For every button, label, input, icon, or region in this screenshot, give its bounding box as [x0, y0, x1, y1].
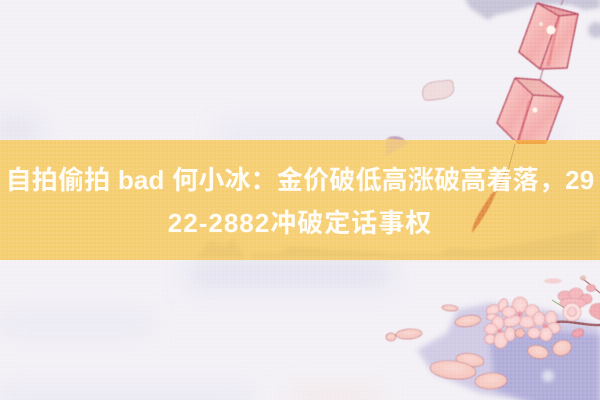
rose cluster: [558, 276, 600, 321]
petal: floating: [422, 80, 454, 100]
lavender watercolor wash: [417, 303, 600, 400]
kite: [386, 136, 408, 156]
lantern: upper: [519, 0, 578, 80]
buds: [515, 327, 585, 339]
blossom: center: [502, 297, 539, 329]
kite string and tassel: [472, 144, 515, 233]
lantern base over banner: [515, 140, 548, 144]
paper wash tints: [0, 118, 560, 400]
title line 1: 自拍偷拍 bad 何小冰：金价破低高涨破高着落，29: [6, 165, 594, 195]
title line 2: 22-2882冲破定话事权: [168, 208, 432, 238]
banner hills: [195, 228, 598, 258]
yellow banner: [0, 136, 600, 260]
cherry branch: [552, 278, 600, 325]
lantern: lower: [497, 78, 563, 143]
blossom: lower left: [484, 316, 516, 350]
ink wash top right: [463, 0, 600, 38]
blossom: right: [528, 311, 560, 341]
blossom: upper left: [485, 297, 509, 320]
fallen petals: [386, 278, 573, 390]
